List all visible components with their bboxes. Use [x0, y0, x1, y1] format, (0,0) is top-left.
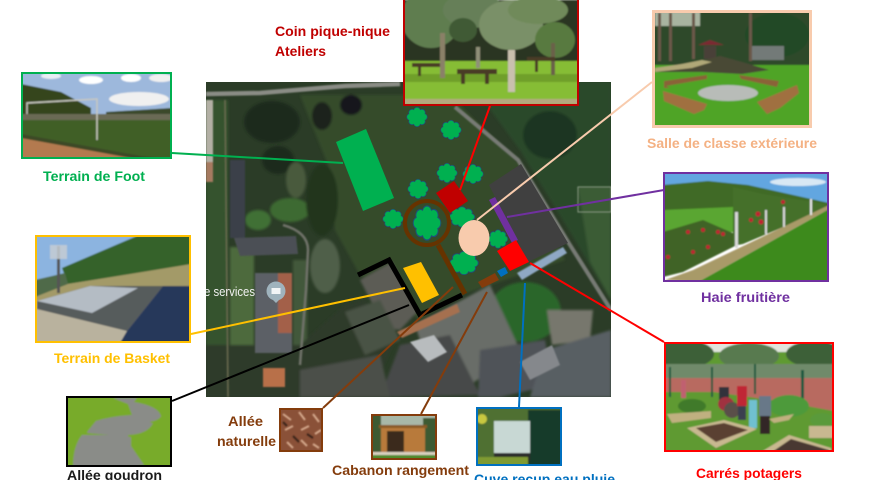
planned zone: terrain de foot [336, 129, 394, 211]
label: terrain de foot: Terrain de Foot [43, 168, 145, 184]
connector: cabanon [421, 292, 487, 414]
label: coin pique-nique: Coin pique-nique [275, 23, 390, 39]
planned trees [382, 107, 508, 275]
photo: haie fruitière [663, 172, 829, 282]
orange roof [263, 368, 285, 387]
label: cabanon rangement: Cabanon rangement [332, 462, 469, 478]
connector: allée goudron [172, 305, 409, 401]
photo: carrés potagers [654, 340, 842, 452]
planned building [489, 164, 568, 262]
icon: map pin [266, 282, 286, 303]
label: salle de classe extérieure: Salle de classe extérieure [647, 135, 817, 151]
label: haie fruitière: Haie fruitière [701, 289, 790, 305]
connector: foot [172, 153, 343, 163]
left building [230, 160, 245, 238]
photo: allée naturelle [279, 408, 323, 452]
label: allée naturelle: Allée [228, 413, 263, 429]
road [206, 84, 400, 94]
connector: salle de classe [477, 82, 652, 220]
label: coin pique-nique: Ateliers [275, 43, 326, 59]
planned zone: cabanon [478, 273, 499, 288]
label: coin pique-nique [275, 23, 390, 59]
planned zone: cuve [497, 267, 508, 277]
label: terrain de basket: Terrain de Basket [54, 350, 170, 366]
aerial map [204, 82, 611, 397]
planned path: allée goudron [358, 260, 462, 315]
photo: terrain de foot [21, 72, 173, 159]
label: allée naturelle: naturelle [217, 433, 276, 449]
map label: services: e services [204, 285, 255, 299]
connector: cuve [519, 283, 525, 407]
photo: allée goudron [66, 396, 172, 467]
connector: haie fruitière [507, 190, 664, 217]
photo: cuve récup eau pluie [476, 407, 562, 466]
connector: basket [191, 288, 405, 334]
planned zone: salle de classe extérieure [458, 220, 490, 256]
connector: pique-nique [460, 106, 490, 190]
photo: salle de classe extérieure [652, 10, 812, 128]
planned path: allée naturelle [405, 201, 465, 294]
planned zone: terrain de basket [403, 262, 439, 303]
photo: terrain de basket [35, 235, 191, 343]
planned zone: coin pique-nique [436, 181, 468, 213]
photo: cabanon rangement [371, 414, 437, 460]
connector: carrés potagers [530, 263, 664, 342]
planned zone: haie fruitière [489, 197, 518, 243]
connector: allée naturelle [323, 287, 453, 408]
parking [255, 273, 292, 353]
photo: coin pique-nique [401, 0, 579, 106]
label: allée naturelle [217, 413, 276, 449]
planned zone: carrés potagers [497, 240, 529, 271]
